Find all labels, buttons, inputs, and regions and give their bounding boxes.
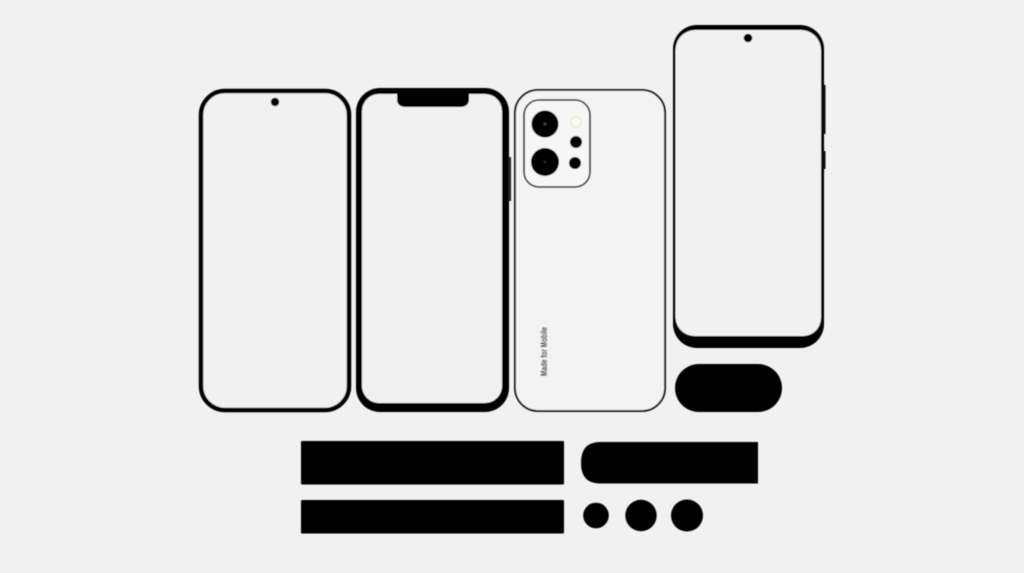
phone 3: back with camera module bbox=[515, 90, 665, 411]
bar: large top bbox=[301, 441, 564, 484]
phone 4: front tall with thick chin bbox=[673, 25, 826, 348]
dot 3 bbox=[671, 500, 703, 532]
phone 2: front with notch bbox=[356, 88, 511, 412]
bar: lower bbox=[301, 500, 564, 534]
side button: power bbox=[822, 85, 826, 134]
icon: punch-hole camera bbox=[744, 34, 752, 42]
camera module bbox=[524, 100, 590, 187]
vertical brand text: Made for Mobile bbox=[539, 327, 549, 376]
icon: small sensor bbox=[570, 136, 582, 148]
dot 2 bbox=[625, 500, 657, 531]
icon: main lens bbox=[532, 110, 558, 138]
black pill bbox=[675, 364, 782, 412]
side button bbox=[508, 157, 511, 201]
dot 1 bbox=[583, 503, 609, 528]
icon: flash bbox=[570, 116, 582, 128]
side button: volume bbox=[822, 151, 826, 169]
icon: small sensor lower bbox=[569, 157, 581, 169]
phone 1: front with punch-hole camera bbox=[201, 91, 349, 410]
icon: second lens bbox=[531, 148, 559, 176]
bar: rounded left bbox=[581, 442, 758, 484]
icon: punch-hole camera bbox=[271, 98, 279, 106]
